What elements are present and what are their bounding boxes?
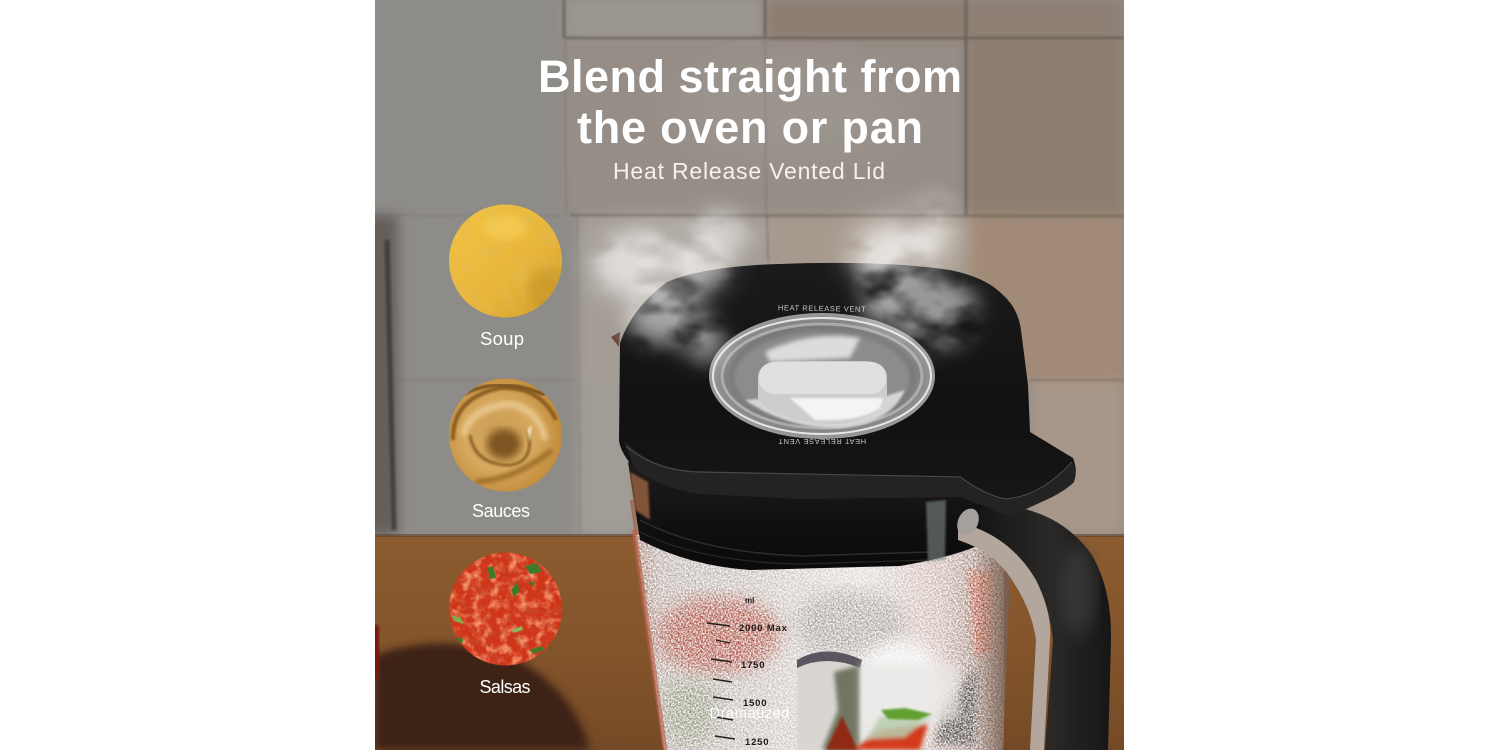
jar collar bbox=[628, 462, 1020, 570]
lid bbox=[611, 263, 1076, 515]
handle bbox=[953, 505, 1111, 750]
wisps bbox=[588, 196, 977, 364]
dramatized note: Dramatized bbox=[710, 706, 790, 722]
title: Blend straight from bbox=[538, 51, 962, 102]
measurement markings: 1750 bbox=[741, 660, 765, 671]
measurement markings: 2000 Max bbox=[739, 623, 788, 634]
title bbox=[538, 51, 962, 153]
jar contents bbox=[656, 597, 780, 673]
infographic scene bbox=[375, 0, 1124, 750]
subtitle: Heat Release Vented Lid bbox=[613, 158, 885, 184]
jar body bbox=[628, 500, 1012, 750]
measurement markings: 1500 bbox=[743, 698, 767, 709]
blender shaft bbox=[797, 650, 860, 750]
food: soup: Soup bbox=[480, 328, 524, 349]
vent label top: HEAT RELEASE VENT bbox=[778, 303, 866, 314]
measurement markings: 1250 bbox=[745, 737, 769, 748]
background mist bbox=[600, 60, 955, 288]
food: sauces: Sauces bbox=[472, 501, 530, 521]
food: sauces bbox=[449, 378, 562, 521]
steam bbox=[588, 60, 977, 364]
wooden counter bbox=[375, 536, 1124, 750]
food: salsas: Salsas bbox=[480, 677, 530, 697]
measurement markings bbox=[739, 596, 788, 748]
measurement markings: ml bbox=[745, 596, 754, 605]
vent label bottom: HEAT RELEASE VENT bbox=[778, 437, 866, 446]
dark round board on counter bbox=[375, 644, 590, 750]
food: soup bbox=[449, 204, 568, 349]
red object at left edge bbox=[375, 624, 380, 681]
food: salsas bbox=[449, 552, 562, 697]
background photo: tiled wall and wooden counter bbox=[360, 0, 1124, 750]
glass vent cap bbox=[709, 313, 935, 439]
title: the oven or pan bbox=[577, 102, 923, 153]
